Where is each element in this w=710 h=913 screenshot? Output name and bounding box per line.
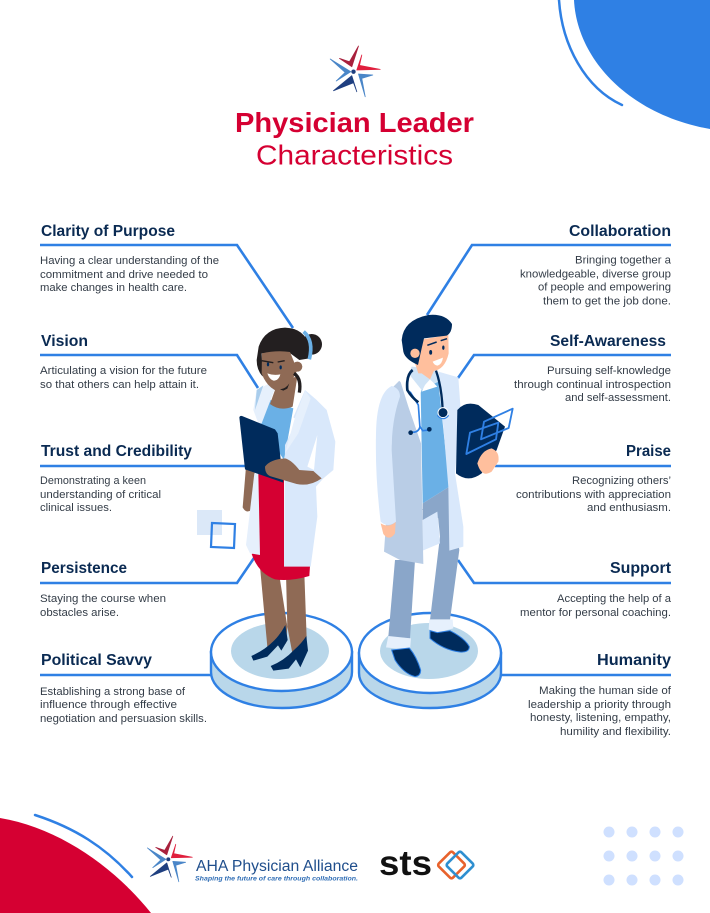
text block: Political Savvy: negotiation and persuasion skills. — [40, 713, 207, 725]
text block: Support: Support — [610, 560, 671, 577]
icon: top star logo — [330, 46, 380, 97]
cuffs — [386, 636, 411, 650]
shirt — [260, 399, 293, 460]
text block: Political Savvy: Political Savvy — [41, 652, 152, 669]
text block: Collaboration: them to get the job done. — [543, 296, 671, 308]
text block: Trust and Credibility: Trust and Credibility — [41, 443, 192, 460]
text block: Self-Awareness — [514, 333, 671, 404]
connector lines right — [427, 245, 671, 675]
coat right panel — [438, 372, 463, 551]
platform right — [359, 613, 501, 708]
skirt — [252, 472, 310, 580]
dot grid — [604, 826, 684, 886]
coat under-panel — [423, 512, 440, 551]
text block: Support: mentor for personal coaching. — [520, 607, 671, 619]
text block: Persistence — [40, 560, 166, 619]
neck and collar — [407, 367, 438, 390]
text block: Persistence: Persistence — [41, 560, 127, 577]
footer logo: AHA Physician Alliance: Shaping the future of care through collaboration. — [195, 876, 358, 882]
text block: Support — [520, 560, 672, 619]
text block: Humanity — [528, 652, 672, 738]
bottom left corner shape — [0, 815, 151, 913]
illustration: woman doctor — [239, 328, 335, 671]
footer logo: sts: sts — [379, 844, 432, 883]
stethoscope — [407, 370, 449, 435]
text block: Self-Awareness: and self-assessment. — [565, 392, 671, 404]
footer logo: sts — [379, 844, 474, 883]
folder outlines — [466, 409, 513, 454]
text block: Collaboration: Collaboration — [569, 223, 671, 240]
text block: Collaboration: Bringing together a — [575, 254, 672, 266]
text block: Trust and Credibility: Demonstrating a keen — [40, 475, 146, 487]
text block: Trust and Credibility: understanding of critical — [40, 489, 161, 501]
text block: Humanity: humility and flexibility. — [560, 726, 671, 738]
neck — [270, 377, 297, 409]
hair back and side locks — [257, 328, 309, 377]
coat upper left — [253, 384, 275, 423]
footer logo: AHA Physician Alliance — [147, 836, 358, 882]
eyes and smile — [262, 361, 285, 381]
text block: Vision — [40, 333, 207, 391]
hair — [402, 315, 452, 365]
title: Characteristics — [256, 140, 453, 170]
text block: Self-Awareness: Pursuing self-knowledge — [547, 365, 671, 377]
shirt — [421, 382, 449, 503]
legs — [260, 567, 287, 647]
top right corner shape — [559, 0, 710, 129]
text block: Vision: so that others can help attain it. — [40, 379, 199, 391]
text block: Praise: and enthusiasm. — [587, 502, 671, 514]
ear — [410, 349, 420, 358]
text block: Clarity of Purpose: Clarity of Purpose — [41, 223, 175, 240]
text block: Self-Awareness: Self-Awareness — [550, 333, 666, 350]
text block: Vision: Vision — [41, 333, 88, 350]
face — [417, 335, 449, 373]
face — [262, 351, 297, 392]
text block: Vision: Articulating a vision for the future — [40, 365, 207, 377]
text block: Political Savvy: influence through effective — [40, 699, 177, 711]
text block: Collaboration: of people and empowering — [538, 282, 671, 294]
clipboard — [239, 416, 283, 483]
text block: Humanity: Making the human side of — [539, 685, 672, 697]
hand and arm — [265, 458, 322, 485]
icon: footer star — [147, 836, 192, 882]
text block: Support: Accepting the help of a — [557, 593, 672, 605]
coat right — [284, 390, 335, 567]
text block: Trust and Credibility — [40, 443, 192, 514]
footer logo: AHA Physician Alliance: AHA Physician Alliance — [196, 858, 358, 875]
text block: Clarity of Purpose: Having a clear understanding of the — [40, 255, 219, 267]
back arm — [243, 467, 255, 511]
coat left panel — [246, 473, 260, 555]
text block: Collaboration: knowledgeable, diverse group — [520, 268, 671, 280]
text block: Humanity: leadership a priority through — [528, 699, 671, 711]
hand left — [381, 522, 396, 538]
illustration: man doctor — [376, 315, 513, 677]
title: Physician Leader — [235, 107, 474, 138]
eyes and smile — [427, 339, 447, 366]
text block: Trust and Credibility: clinical issues. — [40, 502, 112, 514]
text block: Political Savvy — [40, 652, 207, 725]
text block: Collaboration — [520, 223, 672, 308]
sleeve — [376, 386, 400, 525]
title — [235, 107, 474, 170]
hand right — [477, 448, 499, 474]
text block: Clarity of Purpose: commitment and drive needed to — [40, 269, 208, 281]
text block: Praise — [516, 443, 671, 514]
text block: Praise: Praise — [626, 443, 671, 460]
platform left — [211, 613, 352, 708]
text block: Persistence: obstacles arise. — [40, 607, 119, 619]
coat back panel — [384, 380, 423, 564]
text block: Persistence: Staying the course when — [40, 593, 166, 605]
text block: Praise: contributions with appreciation — [516, 489, 671, 501]
decorative squares — [197, 510, 235, 548]
shoes — [392, 648, 421, 677]
folder — [456, 404, 505, 478]
text block: Humanity: honesty, listening, empathy, — [530, 712, 671, 724]
hair band — [304, 332, 311, 359]
curl — [294, 373, 300, 393]
text block: Self-Awareness: through continual introspection — [514, 379, 671, 391]
text block: Clarity of Purpose: make changes in health care. — [40, 282, 187, 294]
text block: Political Savvy: Establishing a strong base of — [40, 686, 186, 698]
heels — [251, 625, 288, 661]
text block: Clarity of Purpose — [40, 223, 219, 294]
connector lines left — [40, 245, 293, 675]
ear — [292, 362, 302, 372]
bun — [301, 334, 322, 355]
text block: Humanity: Humanity — [597, 652, 671, 669]
chin shadow — [280, 383, 289, 391]
pants — [388, 560, 415, 638]
text block: Praise: Recognizing others’ — [572, 475, 671, 487]
